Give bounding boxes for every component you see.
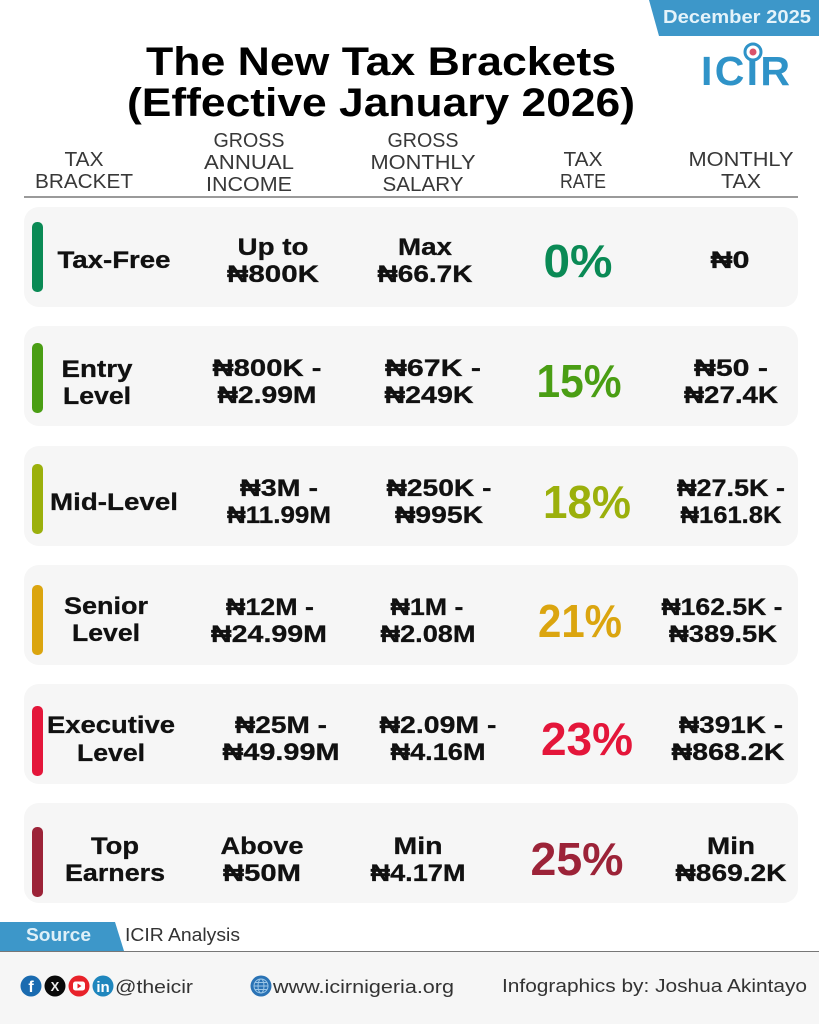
row: Tax-Free: 0% xyxy=(544,235,612,287)
row: Top Earners: ₦869.2K xyxy=(676,860,787,887)
row: Top Earners: 25% xyxy=(530,833,624,885)
icon: youtube xyxy=(68,976,90,996)
row: Mid-Level: Mid-Level xyxy=(50,489,178,516)
row: Executive Level: ₦49.99M xyxy=(222,739,340,766)
table header: INCOME xyxy=(206,174,292,196)
table header xyxy=(35,130,794,196)
row: Executive Level: Level xyxy=(77,740,145,767)
row: Entry Level: ₦800K - xyxy=(212,355,322,382)
source tab xyxy=(0,922,124,951)
row: Tax-Free: ₦66.7K xyxy=(378,261,473,288)
row: Entry Level: ₦27.4K xyxy=(684,382,779,409)
icon: x: X xyxy=(51,979,60,994)
row: Tax-Free: Max xyxy=(398,234,453,261)
row: Mid-Level: ₦3M - xyxy=(240,475,318,502)
row: Entry Level: 15% xyxy=(536,355,622,407)
row: Senior Level: ₦162.5K - xyxy=(662,594,782,621)
icon: facebook: f xyxy=(28,979,34,996)
row: Entry Level xyxy=(24,326,798,426)
row: Executive Level: ₦4.16M xyxy=(390,739,486,766)
footer background xyxy=(0,952,819,1024)
row: Entry Level: ₦50 - xyxy=(694,355,768,382)
row: Executive Level: ₦25M - xyxy=(235,712,327,739)
row: Top Earners: Min xyxy=(394,833,442,860)
row: Senior Level: Senior xyxy=(64,593,148,620)
row: Executive Level: ₦2.09M - xyxy=(380,712,496,739)
row: Entry Level: Level xyxy=(63,383,131,410)
row: Top Earners: ₦50M xyxy=(223,860,301,887)
row: Entry Level: ₦67K - xyxy=(385,355,481,382)
row: Mid-Level: ₦250K - xyxy=(386,475,492,502)
row: Senior Level: ₦1M - xyxy=(390,594,464,621)
row: Tax-Free: Tax-Free xyxy=(58,247,170,274)
row: Top Earners: Earners xyxy=(65,860,165,887)
row: Entry Level: ₦2.99M xyxy=(218,382,316,409)
row: Executive Level: ₦391K - xyxy=(679,712,783,739)
row: Top Earners: Min xyxy=(707,833,755,860)
row: Mid-Level: ₦995K xyxy=(395,502,484,529)
row: Mid-Level: 18% xyxy=(543,476,631,528)
row: Tax-Free: ₦800K xyxy=(227,261,320,288)
social icons xyxy=(20,976,114,996)
row: Mid-Level: ₦27.5K - xyxy=(677,475,785,502)
table header: BRACKET xyxy=(35,171,133,193)
table header: GROSS xyxy=(214,130,284,152)
title: The New Tax Brackets xyxy=(146,40,616,84)
row: Tax-Free xyxy=(24,207,798,307)
social handle: @theicir xyxy=(115,977,193,997)
row: Senior Level xyxy=(24,565,798,665)
row: Top Earners: Top xyxy=(91,833,139,860)
table header: GROSS xyxy=(388,130,458,152)
title xyxy=(127,40,635,125)
date tab xyxy=(649,0,819,36)
row: Executive Level: 23% xyxy=(541,713,633,765)
row: Mid-Level: ₦11.99M xyxy=(227,502,331,529)
table header: ANNUAL xyxy=(204,152,294,174)
row: Top Earners xyxy=(24,803,798,903)
icon: globe xyxy=(250,976,272,996)
row: Top Earners: Above xyxy=(220,833,304,860)
row: Senior Level: ₦2.08M xyxy=(380,621,476,648)
row: Tax-Free: ₦0 xyxy=(710,247,750,274)
table header: MONTHLY xyxy=(370,152,476,174)
row: Executive Level: Executive xyxy=(47,712,175,739)
icon: linkedin: in xyxy=(96,979,110,996)
row: Senior Level: Level xyxy=(72,620,140,647)
row: Executive Level xyxy=(24,684,798,784)
table header: MONTHLY xyxy=(688,149,794,171)
row: Mid-Level xyxy=(24,446,798,546)
source tab: Source xyxy=(26,925,91,945)
date tab: December 2025 xyxy=(663,7,811,27)
row: Senior Level: 21% xyxy=(538,595,622,647)
row: Senior Level: ₦389.5K xyxy=(669,621,778,648)
row: Executive Level: ₦868.2K xyxy=(672,739,785,766)
table header: RATE xyxy=(560,171,606,193)
logo: ICIR: ICIR xyxy=(701,48,790,94)
row: Entry Level: Entry xyxy=(62,356,133,383)
title: (Effective January 2026) xyxy=(127,81,635,125)
row: Top Earners: ₦4.17M xyxy=(370,860,466,887)
source text: ICIR Analysis xyxy=(125,925,240,945)
row: Senior Level: ₦12M - xyxy=(226,594,314,621)
table header: SALARY xyxy=(382,174,464,196)
row: Mid-Level: ₦161.8K xyxy=(680,502,782,529)
row: Senior Level: ₦24.99M xyxy=(211,621,327,648)
table header: TAX xyxy=(721,171,761,193)
website: www.icirnigeria.org xyxy=(272,977,454,997)
credit: Infographics by: Joshua Akintayo xyxy=(502,976,807,996)
table header: TAX xyxy=(564,149,602,171)
row: Entry Level: ₦249K xyxy=(384,382,474,409)
row: Tax-Free: Up to xyxy=(238,234,308,261)
table header: TAX xyxy=(64,149,104,171)
